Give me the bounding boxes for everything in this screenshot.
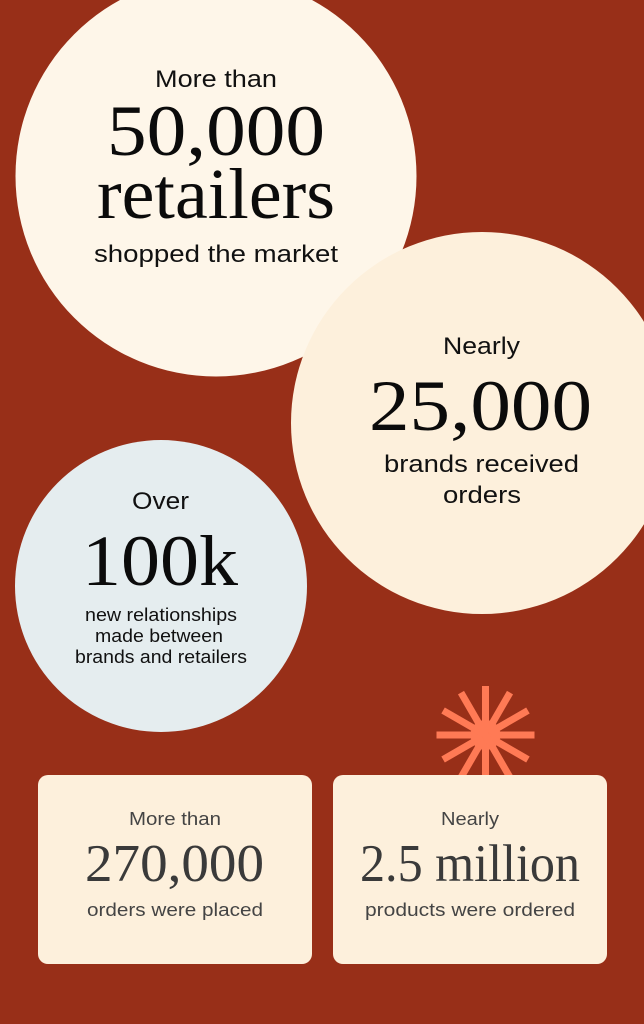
text: orders: orders <box>443 482 521 509</box>
panel: products card <box>333 775 607 964</box>
text: made between: made between <box>95 626 223 646</box>
panel: orders card <box>38 775 312 964</box>
text: over: Over <box>132 488 189 515</box>
stat: 270,000: 270,000 <box>85 835 264 893</box>
panel: 50,000 retailers circle <box>16 0 416 376</box>
stat: retailers: retailers <box>97 154 335 234</box>
text: nearly: Nearly <box>441 809 499 829</box>
text: more than: More than <box>129 809 221 829</box>
text: nearly: Nearly <box>443 333 520 360</box>
stat: 2.5 million: 2.5 million <box>360 835 580 893</box>
stat: 100k: 100k <box>82 521 238 601</box>
text: products were ordered: products were ordered <box>365 900 575 920</box>
text: brands and retailers: brands and retailers <box>75 647 247 667</box>
text: shopped the market: shopped the market <box>94 241 338 268</box>
stat: 25,000: 25,000 <box>369 366 592 446</box>
text: brands received: brands received <box>384 451 579 478</box>
text: new relationships: new relationships <box>85 605 237 625</box>
panel: 100k relationships circle <box>15 440 307 732</box>
panel: 25,000 brands circle <box>291 232 644 614</box>
text: more than: More than <box>155 66 277 93</box>
text: orders were placed: orders were placed <box>87 900 263 920</box>
icon: coral starburst <box>436 686 534 784</box>
stat: 50,000: 50,000 <box>107 91 325 171</box>
